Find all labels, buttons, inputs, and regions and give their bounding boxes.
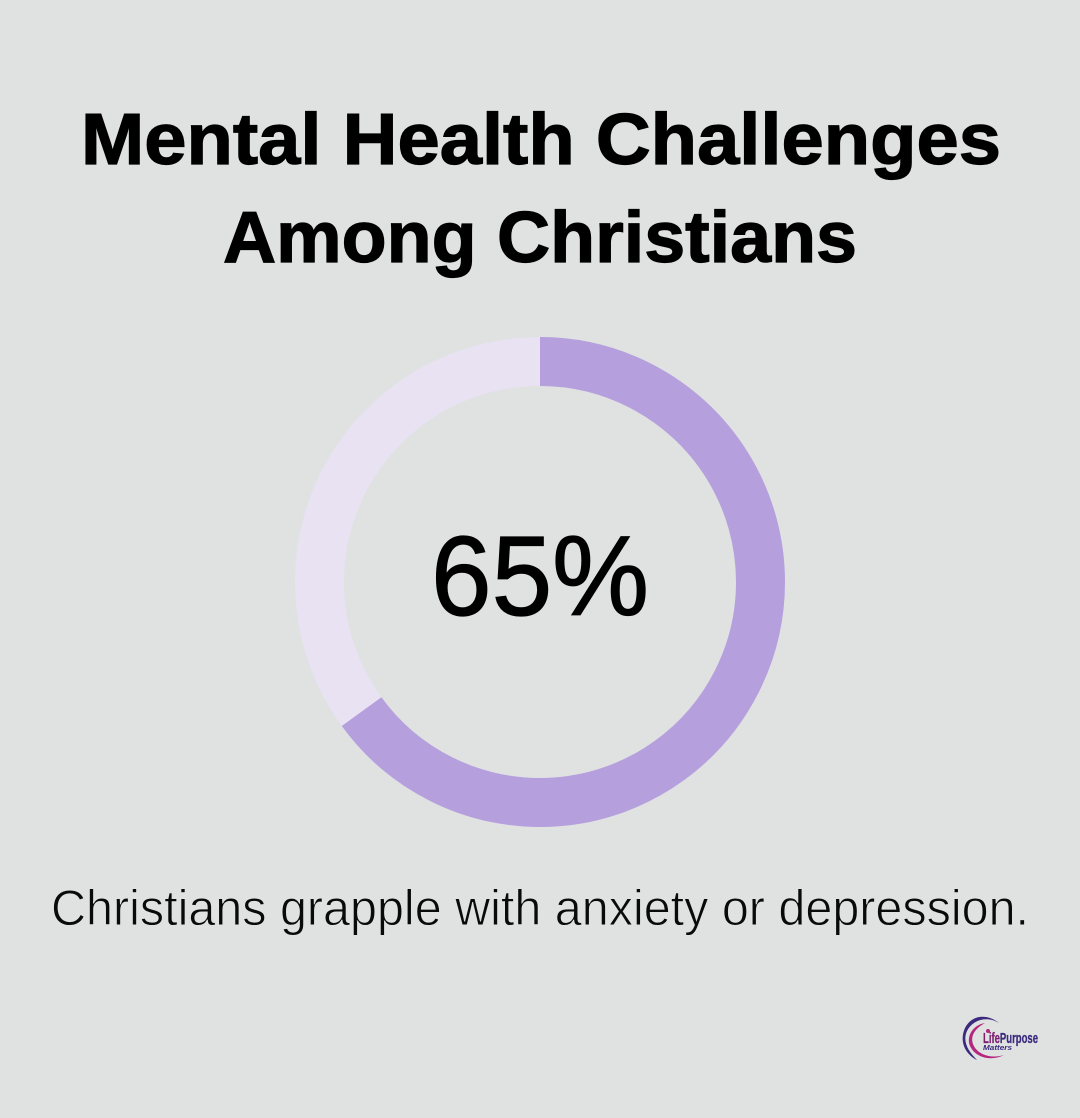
logo outer arc	[963, 1017, 999, 1060]
logo wordmark: LifePurpose	[983, 1030, 1038, 1047]
caption: Christians grapple with anxiety or depression.	[51, 880, 1029, 936]
logo inner arc	[969, 1023, 1004, 1058]
logo tagline: Matters	[983, 1043, 1012, 1052]
title: Mental Health Challenges	[81, 99, 1001, 180]
donut chart: 65%	[320, 362, 760, 803]
title: Among Christians	[223, 197, 857, 278]
title	[81, 99, 1001, 278]
logo: Life Purpose Matters	[963, 1017, 1038, 1060]
center value: 65%	[431, 513, 649, 639]
logo heart	[986, 1029, 990, 1033]
